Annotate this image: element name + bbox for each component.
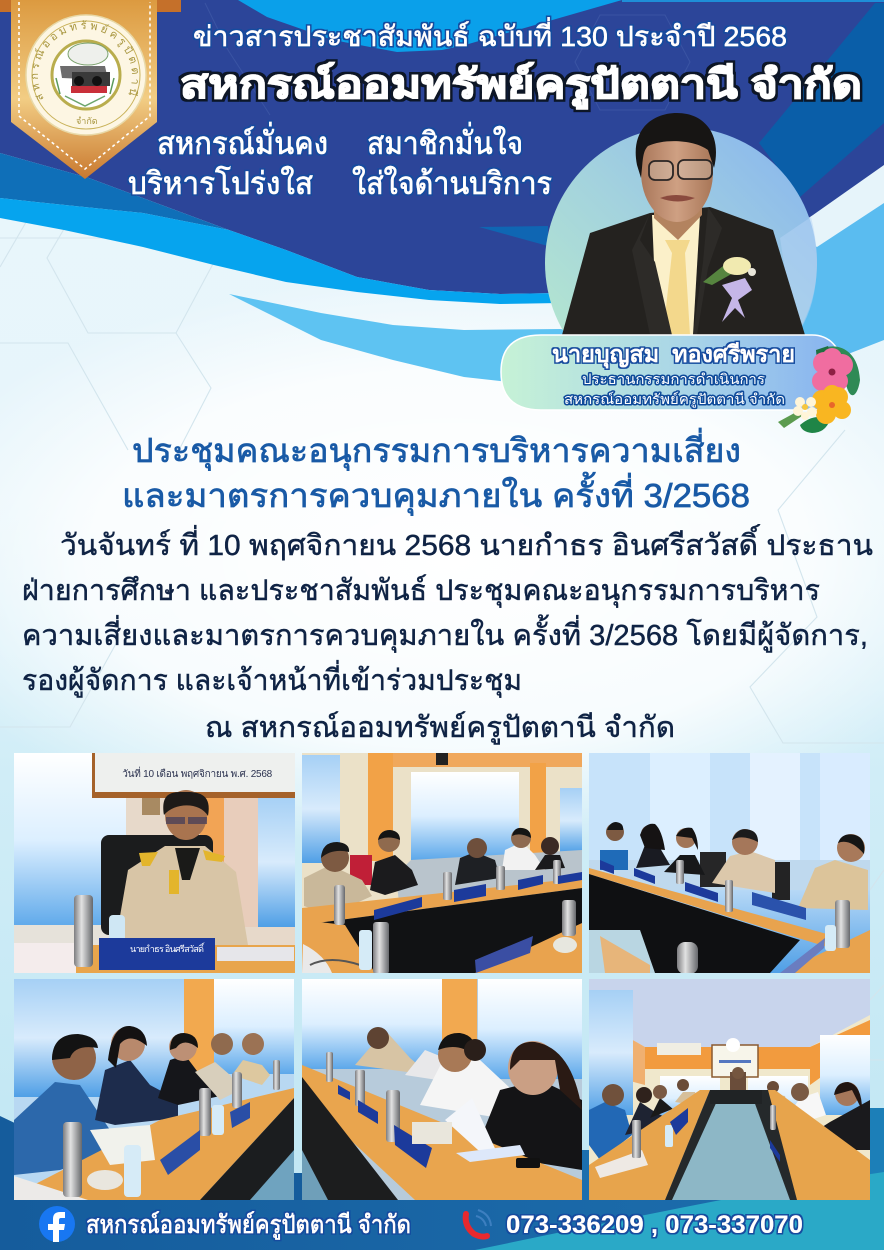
position: ประธานกรรมการดำเนินการ <box>582 371 766 387</box>
phone numbers: 073-336209 , 073-337070 <box>506 1211 803 1239</box>
small mid blue wedge by the circle <box>479 226 548 246</box>
issue line: ข่าวสารประชาสัมพันธ์ ฉบับที่ 130 ประจำปี 2568 <box>193 17 787 52</box>
neck and head <box>654 190 702 240</box>
white stripe <box>790 163 884 247</box>
photo 1: chairman at desk: นายกำธร อินศรีสวัสดิ์ <box>130 942 205 954</box>
photo 1: chairman at desk: วันที่ 10 เดือน พฤศจิกายน พ.ศ. 2568 <box>122 766 273 780</box>
photo 4: row of attendees <box>14 979 294 1200</box>
bottom wave band <box>0 1108 884 1250</box>
photo 2: table left side <box>302 753 582 974</box>
news heading: และมาตรการควบคุมภายใน ครั้งที่ 3/2568 <box>122 472 750 516</box>
dark blue main shape <box>0 0 884 294</box>
facebook page name: สหกรณ์ออมทรัพย์ครูปัตตานี จำกัด <box>86 1211 411 1240</box>
man's suit <box>562 207 805 335</box>
logo badge: สหกรณ์ออมทรัพย์ครูปัตตานี <box>32 20 138 101</box>
flowers <box>778 346 860 433</box>
slogans: สหกรณ์มั่นคง <box>157 122 328 161</box>
cyan ribbon <box>0 198 560 304</box>
news body text: วันจันทร์ ที่ 10 พฤศจิกายน 2568 นายกำธร อินศรีสวัสดิ์ ประธาน <box>60 524 873 562</box>
portrait circle <box>545 127 817 399</box>
news body text: ความเสี่ยงและมาตรการควบคุมภายใน ครั้งที่ 3/2568 โดยมีผู้จัดการ, <box>22 614 868 653</box>
light blue wedge <box>229 294 640 390</box>
logo badge <box>0 0 181 179</box>
phone icon <box>466 1210 491 1237</box>
name: นายบุญสม ทองศรีพราย <box>552 341 795 369</box>
news body text: ณ สหกรณ์ออมทรัพย์ครูปัตตานี จำกัด <box>205 711 675 745</box>
slogans <box>128 122 552 201</box>
hexagon pattern <box>0 188 884 1060</box>
header waves <box>0 0 884 390</box>
slogans: บริหารโปร่งใส <box>128 166 313 201</box>
news body text <box>22 524 873 745</box>
tie <box>663 240 690 335</box>
organisation: สหกรณ์ออมทรัพย์ครูปัตตานี จำกัด <box>564 391 785 408</box>
slogans: สมาชิกมั่นใจ <box>367 122 523 161</box>
slogans: ใส่ใจด้านบริการ <box>352 166 552 201</box>
facebook icon <box>39 1206 75 1242</box>
news body text: ฝ่ายการศึกษา และประชาสัมพันธ์ ประชุมคณะอนุกรรมการบริหาร <box>22 574 820 608</box>
logo badge: จำกัด <box>76 116 98 126</box>
light blue right area <box>640 196 884 356</box>
news body text: รองผู้จัดการ และเจ้าหน้าที่เข้าร่วมประชุม <box>22 660 522 698</box>
photo 5: attendees reading documents <box>302 979 582 1200</box>
news heading <box>122 428 750 516</box>
main title: สหกรณ์ออมทรัพย์ครูปัตตานี จำกัด <box>180 62 862 109</box>
news heading: ประชุมคณะอนุกรรมการบริหารความเสี่ยง <box>132 428 741 471</box>
shirt <box>652 215 700 335</box>
left mid blue wave <box>0 153 229 230</box>
mid blue top-right band <box>759 3 884 197</box>
photo 6: wide room view <box>589 979 870 1200</box>
top cyan wave <box>238 0 622 52</box>
photo 1: chairman at desk <box>14 753 295 973</box>
photo 3: table right side <box>589 753 870 974</box>
corsage <box>703 257 756 322</box>
portrait <box>545 113 817 399</box>
name tag <box>501 335 845 410</box>
